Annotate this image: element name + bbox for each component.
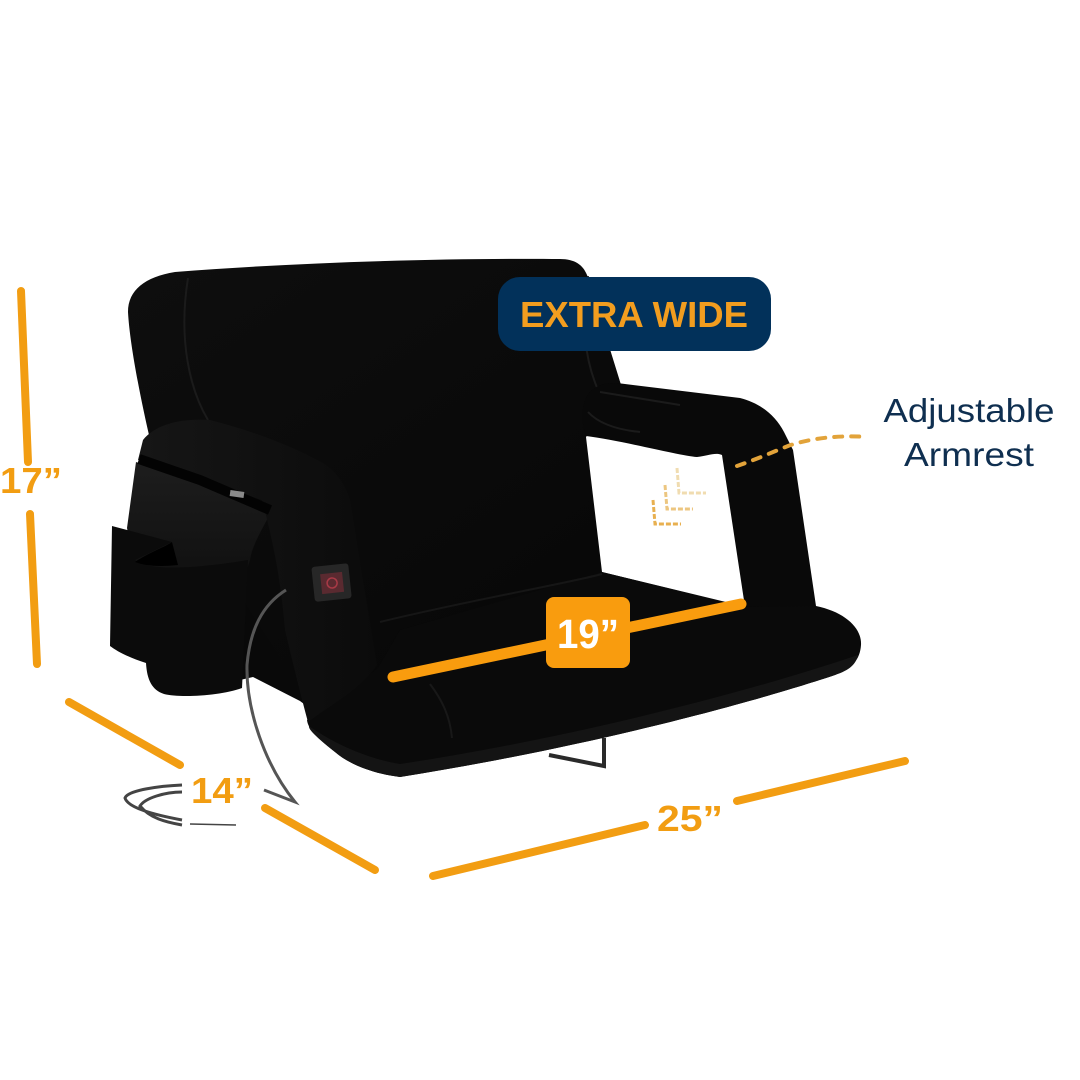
extra wide badge — [498, 277, 771, 351]
backrest — [128, 259, 740, 690]
depth label: 14” — [191, 770, 253, 811]
right armrest — [583, 383, 816, 607]
seat width badge — [546, 597, 630, 668]
seat front edge band — [309, 655, 858, 777]
seat width dimension line — [393, 604, 741, 677]
cord remnant — [190, 824, 236, 825]
left armrest — [138, 420, 377, 722]
adjustable armrest callout — [884, 392, 1054, 473]
power button — [311, 563, 352, 602]
power cord — [247, 590, 295, 802]
width dimension line — [433, 761, 905, 876]
kickstand — [549, 738, 604, 766]
adjustable armrest callout: Armrest — [904, 436, 1034, 473]
cord loops — [125, 785, 182, 825]
width label: 25” — [657, 798, 723, 839]
chair — [110, 259, 861, 825]
storage bag — [127, 462, 272, 572]
depth dimension line — [69, 702, 180, 765]
height dimension line — [21, 291, 37, 664]
dashed leader line — [737, 436, 868, 466]
pocket opening — [135, 542, 178, 566]
zipper — [139, 459, 270, 510]
adjustable armrest callout: Adjustable — [884, 392, 1054, 429]
seat cushion — [307, 572, 861, 777]
movement chevrons — [653, 468, 706, 524]
cup pocket — [110, 526, 248, 696]
zipper pull — [230, 490, 244, 498]
seat width badge: 19” — [557, 611, 619, 657]
armrest pad outline — [588, 392, 680, 432]
rear shadow panel — [236, 500, 312, 710]
extra wide badge: EXTRA WIDE — [520, 294, 748, 335]
backrest seam — [184, 276, 598, 420]
seat seam — [430, 684, 452, 738]
height label: 17” — [0, 460, 62, 501]
